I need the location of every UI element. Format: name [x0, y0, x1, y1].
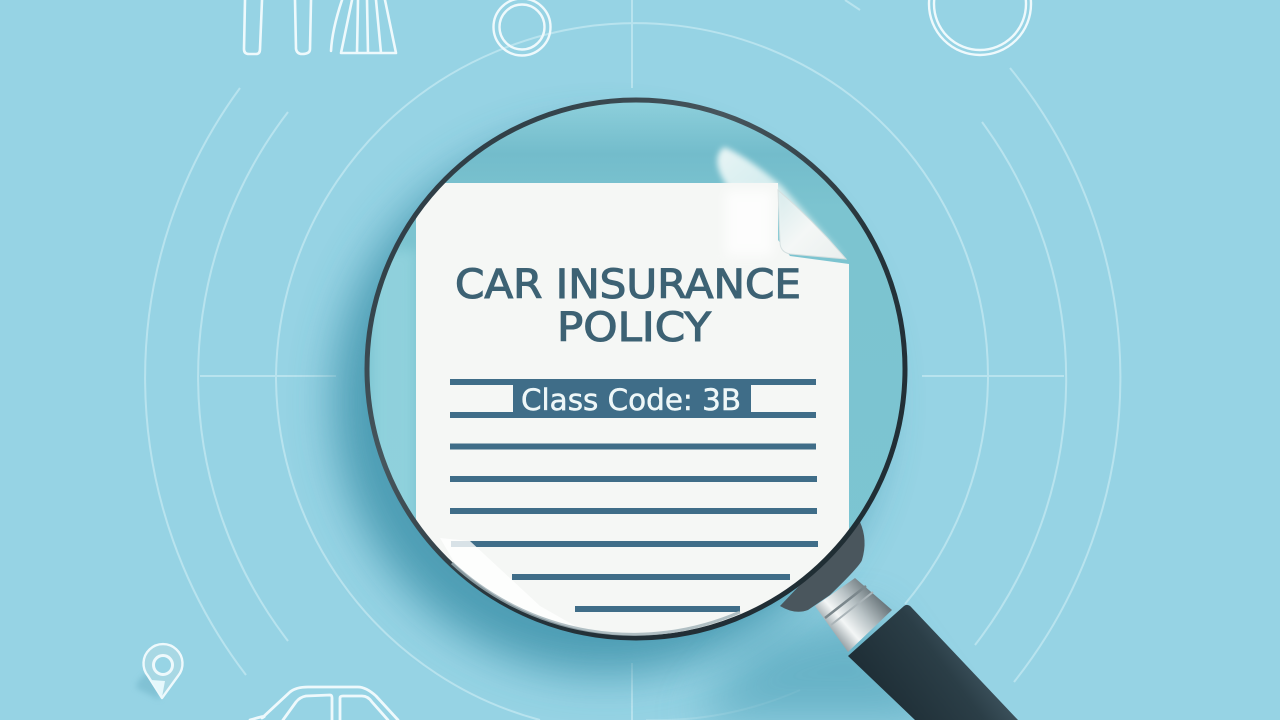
icon: location pin [136, 644, 182, 700]
document title: CAR INSURANCE [455, 262, 801, 308]
class code banner: Class Code: 3B [521, 383, 741, 417]
magnifying lens [367, 100, 905, 640]
insurance policy sheet [416, 183, 849, 640]
icon: cutlery and fan outlines [244, 0, 396, 54]
soft sheen [778, 207, 780, 242]
icon: large circle [929, 0, 1031, 55]
magnifying glass handle [780, 522, 1018, 720]
metal ferrule [815, 578, 892, 652]
document title [456, 268, 799, 342]
folded corner [778, 190, 846, 259]
glass left highlight [372, 250, 416, 519]
infographic scene [136, 0, 1122, 720]
document title: POLICY [557, 305, 712, 351]
lens rim [367, 100, 905, 638]
collar [780, 522, 865, 612]
handle grip [848, 605, 1018, 720]
icon: ring [494, 0, 550, 56]
lens drop shadow [334, 130, 950, 720]
concentric radar rings [145, 0, 1120, 720]
glass reflection [451, 541, 476, 547]
icon: car outline [250, 687, 398, 720]
glass [369, 102, 903, 636]
paper curl glow [717, 147, 846, 258]
rim highlight [452, 563, 740, 634]
document text lines [450, 444, 818, 612]
class code banner [450, 379, 816, 418]
